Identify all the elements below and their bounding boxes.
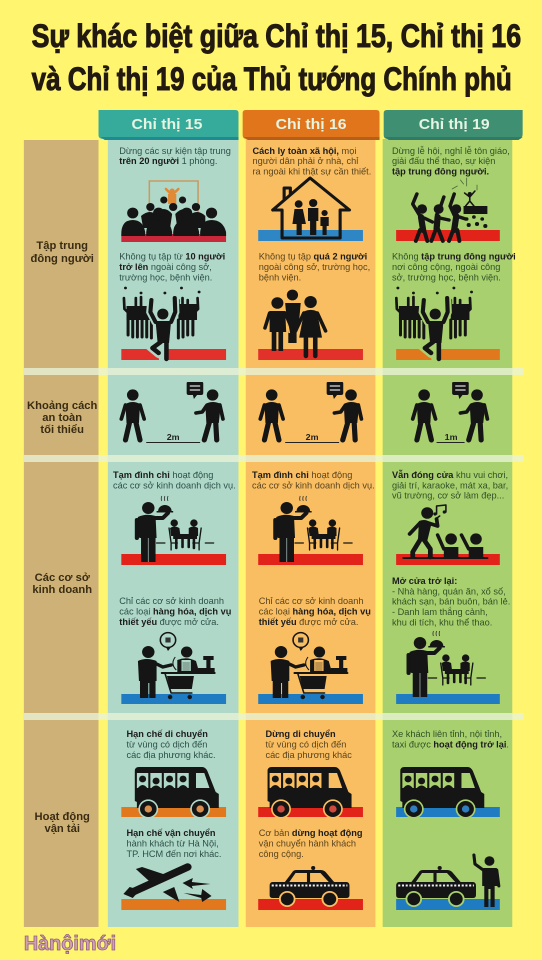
label: Tập trung đông người: đông người: [31, 253, 94, 265]
text: CT15 gathering 2: trường học, bệnh viện.: [119, 273, 212, 282]
text: CT15 business 2: thiết yếu được mở cửa.: [119, 617, 219, 627]
text: CT19 transport 1: taxi được hoạt động trở lại.: [392, 740, 509, 749]
header: Chỉ thị 19: [384, 110, 523, 140]
text: CT19 reopening list: khu di tích, khu thể thao.: [392, 618, 492, 627]
text: CT16 gathering 1: ra ngoài khi thật sự cần thiết.: [253, 167, 371, 176]
text: CT16 business 1: [252, 470, 375, 490]
text: CT16 transport 2: công cộng.: [259, 849, 304, 859]
label: Tập trung đông người: [31, 240, 94, 265]
text: CT19 transport 1: Xe khách liên tỉnh, nội tỉnh,: [392, 729, 502, 739]
text: CT19 transport 1: [392, 729, 509, 749]
icon: audience and speaker: [121, 181, 226, 242]
text: CT15 transport 2: [127, 828, 221, 859]
text: CT19 gathering 2: [392, 252, 516, 282]
text: CT16 gathering 1: Cách ly toàn xã hội, mọi: [253, 146, 356, 156]
text: CT16 transport 1: [265, 729, 352, 760]
text: CT19 gathering 2: nơi công cộng, ngoài công: [392, 262, 500, 272]
text: CT15 transport 2: TP. HCM đến nơi khác.: [127, 849, 221, 859]
text: CT16 business 1: các cơ sở kinh doanh dịch vụ.: [252, 481, 375, 490]
icon: crowd, CT15: [121, 287, 226, 360]
text: CT16 transport 1: các địa phương khác: [265, 750, 352, 760]
text: CT16 gathering 2: [259, 252, 370, 282]
text: CT19 business 1: Vẫn đóng cửa khu vui chơi,: [392, 470, 508, 480]
text: CT16 gathering 2: Không tụ tập quá 2 người: [259, 252, 367, 261]
text: CT15 transport 2: Hạn chế vận chuyển: [127, 828, 216, 838]
text: CT19 reopening list: khách sạn, bán buôn, bán lẻ.: [392, 597, 510, 606]
icon: dancing crowd at festival: [396, 178, 500, 241]
label: Hoạt động vận tải: Hoạt động: [35, 811, 90, 823]
text: CT19 gathering 1: tập trung đông người.: [392, 167, 489, 176]
label: Khoảng cách an toàn tối thiểu: [27, 400, 98, 436]
header: Chỉ thị 19: Chỉ thị 19: [419, 116, 490, 133]
icon: bus, CT16: [258, 767, 363, 819]
icon: waiter, CT19: [396, 631, 500, 704]
logo: Hànộimới: Hànộimới: [24, 933, 116, 955]
text: CT19 business 1: giải trí, karaoke, mát xa, bar,: [392, 481, 508, 490]
title: [32, 18, 521, 97]
text: CT19 reopening list: - Danh lam thắng cảnh,: [392, 607, 488, 617]
icon: taxi and hailing person, CT19: [396, 855, 500, 910]
text: CT16 business 2: [259, 596, 371, 627]
label: Khoảng cách an toàn tối thiểu: an toàn: [42, 412, 82, 424]
text: CT15 gathering 1: trên 20 người 1 phòng.: [119, 156, 217, 166]
text: CT16 transport 2: [259, 828, 363, 859]
text: CT15 business 2: [119, 596, 231, 627]
panel: Chỉ thị 19 column: [383, 139, 512, 927]
text: CT19 reopening list: Mở cửa trở lại:: [392, 576, 457, 586]
icon: distance 2m, CT16: [260, 382, 361, 442]
label: Các cơ sở kinh doanh: [32, 572, 92, 596]
icon: waiter, CT16: [258, 496, 363, 565]
label: Khoảng cách an toàn tối thiểu: tối thiểu: [40, 424, 84, 436]
text: CT16 business 2: Chỉ các cơ sở kinh doanh: [259, 596, 363, 606]
header: Chỉ thị 15: Chỉ thị 15: [132, 116, 203, 133]
icon: distance 2m, CT16: 2m: [306, 432, 319, 442]
text: CT16 gathering 2: ngoài công sở, trường học,: [259, 262, 370, 272]
text: CT15 transport 1: từ vùng có dịch đến: [127, 740, 207, 749]
label: Khoảng cách an toàn tối thiểu: Khoảng cách: [27, 400, 98, 412]
panel: Chỉ thị 16 column: [246, 139, 375, 927]
icon: crowd, CT19: [396, 287, 500, 360]
row dividers: [24, 368, 524, 720]
text: CT15 business 2: Chỉ các cơ sở kinh doanh: [119, 596, 224, 606]
text: CT15 business 1: Tạm đình chỉ hoạt động: [113, 470, 213, 480]
text: CT19 gathering 1: giải đấu thể thao, sự kiện: [392, 156, 495, 166]
panel: Chỉ thị 15 column: [108, 139, 239, 927]
text: CT19 gathering 2: Không tập trung đông người: [392, 252, 516, 261]
text: CT15 transport 1: các địa phương khác.: [127, 750, 216, 760]
text: CT16 gathering 1: người dân phải ở nhà, chỉ: [253, 156, 358, 166]
text: CT19 gathering 1: Dừng lễ hội, nghỉ lễ tôn giáo,: [392, 146, 510, 156]
text: CT15 business 2: các loại hàng hóa, dịch vụ: [119, 607, 231, 616]
header: Chỉ thị 16: [243, 110, 380, 140]
text: CT16 transport 2: vận chuyển hành khách: [259, 839, 356, 848]
panel: row labels column: [24, 140, 99, 927]
text: CT15 gathering 2: Không tụ tập từ 10 người: [119, 252, 225, 261]
text: CT15 gathering 2: [119, 252, 225, 282]
text: CT19 gathering 2: sở, trường học, bệnh viện.: [392, 273, 501, 282]
icon: distance 1m, CT19: [413, 382, 487, 442]
text: CT15 business 1: [113, 470, 236, 490]
icon: karaoke singer: [396, 505, 500, 565]
icon: shop, CT15: [121, 633, 226, 704]
text: CT15 gathering 2: trở lên ngoài công sở,: [119, 262, 212, 272]
icon: distance 1m, CT19: 1m: [445, 432, 458, 442]
text: CT16 business 2: các loại hàng hóa, dịch vụ: [259, 607, 371, 616]
text: CT19 reopening list: - Nhà hàng, quán ăn, xổ số,: [392, 587, 506, 596]
text: CT16 business 2: thiết yếu được mở cửa.: [259, 617, 358, 627]
icon: shop, CT16: [258, 633, 363, 704]
text: CT16 business 1: Tạm đình chỉ hoạt động: [252, 470, 352, 480]
label: Tập trung đông người: Tập trung: [36, 240, 88, 252]
icon: family in house: [258, 178, 363, 241]
icon: waiter, CT15: [121, 496, 226, 565]
text: CT15 gathering 1: [119, 146, 231, 166]
icon: bus, CT19: [396, 767, 500, 819]
icon: three people: [258, 290, 363, 360]
text: CT15 transport 2: hành khách từ Hà Nội,: [127, 839, 219, 848]
icon: distance 2m, CT15: [121, 382, 223, 442]
header: Chỉ thị 16: Chỉ thị 16: [276, 116, 347, 133]
icon: taxi, CT16: [258, 866, 363, 910]
icon: distance 2m, CT15: 2m: [167, 432, 180, 442]
text: CT19 reopening list: [392, 576, 510, 627]
text: CT16 transport 2: Cơ bản dừng hoạt động: [259, 828, 363, 838]
text: CT19 business 1: [392, 470, 508, 500]
text: CT15 gathering 1: Dừng các sự kiện tập trung: [119, 146, 231, 156]
header: Chỉ thị 15: [99, 110, 239, 140]
label: Hoạt động vận tải: vận tải: [44, 823, 80, 835]
label: Các cơ sở kinh doanh: kinh doanh: [32, 584, 92, 596]
text: CT16 gathering 1: [253, 146, 371, 176]
label: Các cơ sở kinh doanh: Các cơ sở: [35, 572, 90, 584]
icon: airplane with arrows: [121, 867, 226, 910]
label: Hoạt động vận tải: [35, 811, 90, 835]
text: CT15 business 1: các cơ sở kinh doanh dịch vụ.: [113, 481, 236, 490]
icon: bus, CT15: [121, 767, 226, 819]
text: CT15 transport 1: [127, 729, 216, 760]
text: CT15 transport 1: Hạn chế di chuyển: [127, 729, 208, 739]
text: CT19 gathering 1: [392, 146, 510, 176]
text: CT19 business 1: vũ trường, cơ sở làm đẹp...: [392, 491, 504, 500]
text: CT16 gathering 2: bệnh viện.: [259, 273, 301, 282]
text: CT16 transport 1: từ vùng có dịch đến: [265, 740, 346, 749]
text: CT16 transport 1: Dừng di chuyển: [265, 729, 336, 739]
